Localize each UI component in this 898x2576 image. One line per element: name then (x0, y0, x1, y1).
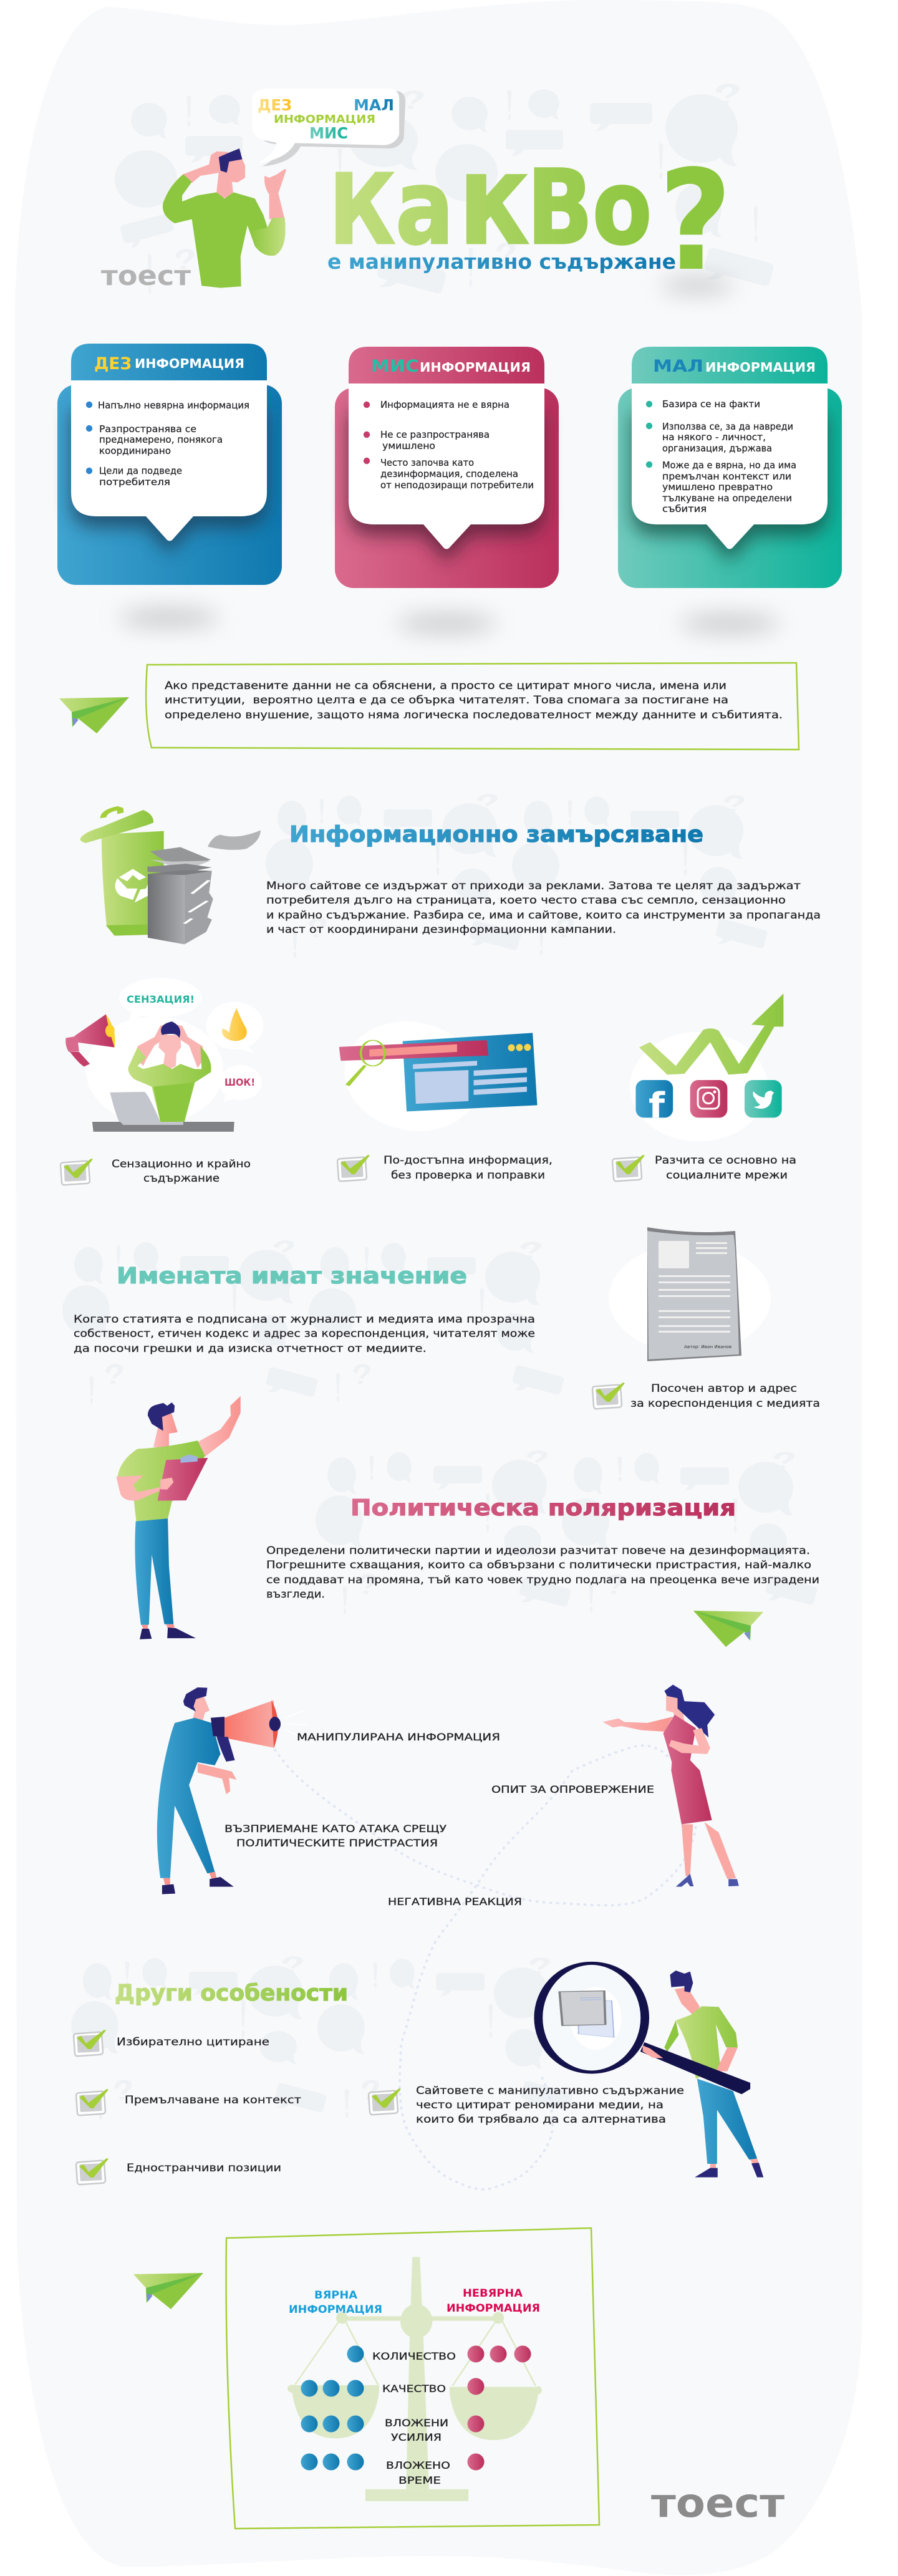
labels: cycle steps: НЕГАТИВНА РЕАКЦИЯ (388, 1896, 522, 1908)
text: Имената имат значение: собственост, етичен кодекс и адрес за кореспонденция, читателят може (74, 1328, 535, 1340)
card: ДЕЗинформация: Разпространява се (99, 423, 196, 435)
rating dots: false information (468, 2346, 531, 2471)
illustration: sensational content (65, 978, 263, 1132)
text: Информационно замърсяване: и крайно съдържание. Разбира се, има и сайтове, които са инструменти за пропаганда (266, 909, 821, 922)
text: Политическа поляризация: възгледи. (266, 1588, 325, 1601)
title: В (527, 148, 593, 268)
card: МАЛинформация: тълкуване на определени (662, 493, 792, 504)
checklist: other features (74, 2030, 301, 2185)
text: Политическа поляризация (266, 1545, 819, 1601)
heading: Други особености: Други особености (115, 1980, 348, 2006)
callout box: Ако представените данни не са обяснени, а просто се цитират много числа, имена или (165, 680, 727, 692)
checkbox: social: Разчита се основно на (655, 1154, 796, 1167)
title: о (592, 148, 652, 268)
heading: Невярна информация: ИНФОРМАЦИЯ (447, 2302, 540, 2315)
card: МАЛинформация: събития (662, 503, 707, 514)
callout box: институции, вероятно целта е да се обърка читателят. Това спомага за постигане на (165, 694, 728, 707)
heading: Вярна информация: ИНФОРМАЦИЯ (289, 2303, 382, 2316)
checklist: other features: Премълчаване на контекст (125, 2094, 301, 2106)
card: ДЕЗинформация: ДЕЗ (94, 354, 132, 374)
card: МАЛинформация: организация, държава (662, 443, 772, 454)
checkbox: sensational: Сензационно и крайно (112, 1158, 251, 1170)
text: Информационно замърсяване: Много сайтове се издържат от приходи за реклами. Затова те целят да задържат (266, 880, 801, 892)
card: МАЛинформация: ИНФОРМАЦИЯ (705, 360, 816, 375)
row labels (372, 2350, 456, 2486)
title: К (329, 153, 395, 266)
row labels: ВРЕМЕ (398, 2474, 441, 2486)
heading: Имената имат значение: Имената имат значение (117, 1263, 467, 1289)
text: Политическа поляризация: Погрешните схващания, които са обвързани с политически пристрастия, най-малко (266, 1559, 811, 1571)
icon: trash bin with paper stack (80, 806, 261, 944)
checkbox: reputable media: които би трябвало да са алтернатива (416, 2113, 666, 2126)
text: Информационно замърсяване (266, 880, 821, 936)
text: Информационно замърсяване: потребителя дълго на страницата, което често става със семпло, сензационно (266, 894, 786, 907)
card: ДЕЗинформация: координирано (99, 445, 171, 456)
icon: twitter (753, 1091, 774, 1109)
checkbox: social: социалните мрежи (666, 1169, 788, 1182)
speech bubble: ДЕЗ МАЛ информация МИС: МАЛ (354, 96, 394, 114)
illustration: article document (609, 1227, 771, 1361)
rating dots: true information (301, 2346, 364, 2471)
heading: Невярна информация (447, 2287, 540, 2315)
speech bubble: ДЕЗ МАЛ информация МИС (252, 89, 405, 166)
heading: Политическа поляризация: Политическа поляризация (350, 1495, 736, 1521)
card: ДЕЗинформация (57, 344, 282, 627)
title: к (458, 128, 529, 273)
card: МАЛинформация: МАЛ (653, 357, 703, 376)
checkbox: author and address: Посочен автор и адрес (651, 1382, 797, 1395)
logo: тоест: тоест (101, 260, 191, 292)
box: true vs false information (226, 2228, 599, 2529)
checkbox: social (612, 1154, 796, 1182)
illustration: thinking person (163, 148, 286, 288)
card: МИСинформация: ИНФОРМАЦИЯ (420, 360, 531, 375)
checkbox: sensational (60, 1158, 251, 1185)
checklist: other features: Избирателно цитиране (117, 2036, 269, 2048)
checkbox: reputable media (369, 2085, 684, 2126)
card: МАЛинформация: Базира се на факти (662, 398, 760, 410)
subtitle: е манипулативно съдържане (327, 249, 676, 274)
card: ДЕЗинформация: Цели да подведе (99, 465, 182, 476)
checkbox: accessible: без проверка и поправки (391, 1169, 545, 1182)
heading: Информационно замърсяване: Информационно замърсяване (289, 822, 703, 847)
shadow under question mark (661, 278, 733, 293)
icon: instagram (698, 1088, 719, 1109)
labels: cycle steps: ПОЛИТИЧЕСКИТЕ ПРИСТРАСТИЯ (236, 1837, 438, 1849)
card: ДЕЗинформация: потребителя (99, 476, 170, 488)
row labels: УСИЛИЯ (391, 2431, 442, 2443)
illustration: man with megaphone (157, 1687, 309, 1894)
text: Политическа поляризация: Определени политически партии и идеолози разчитат повече на дезинформацията. (266, 1545, 810, 1557)
labels: cycle steps: ВЪЗПРИЕМАНЕ КАТО АТАКА СРЕЩУ (224, 1823, 447, 1835)
speech bubble: ДЕЗ МАЛ информация МИС: МИС (309, 124, 348, 142)
heading: Невярна информация: НЕВЯРНА (463, 2287, 523, 2300)
card: МИСинформация: Не се разпространява (380, 429, 490, 440)
illustration: article document: Автор: Иван Иванов (684, 1344, 731, 1349)
illustration: scale (287, 2257, 542, 2501)
labels: cycle steps: ОПИТ ЗА ОПРОВЕРЖЕНИЕ (491, 1783, 654, 1795)
text: Политическа поляризация: се поддават на промяна, тъй като човек трудно подлага на преоценка вече изградени (266, 1574, 819, 1586)
text: Информационно замърсяване: и част от координирани дезинформационни кампании. (266, 924, 616, 936)
speech bubble: ДЕЗ МАЛ информация МИС: ДЕЗ (258, 96, 292, 114)
illustration: social networks growth (630, 993, 783, 1141)
checkbox: author and address (592, 1382, 820, 1410)
labels: cycle steps (224, 1731, 654, 1908)
checkbox: accessible (337, 1154, 553, 1182)
text: Имената имат значение: да посочи грешки и да изиска отчетност от медиите. (74, 1343, 427, 1355)
question mark: ? (659, 141, 732, 302)
illustration: woman pointing (602, 1685, 739, 1887)
dotted path: cycle (275, 1745, 696, 2189)
heading: Вярна информация: ВЯРНА (314, 2289, 358, 2302)
text: Имената имат значение: Когато статията е подписана от журналист и медията има прозрачна (74, 1313, 535, 1326)
card: МАЛинформация: Може да е вярна, но да има (662, 460, 796, 471)
illustration: person with magnifier (538, 1963, 763, 2178)
speech bubble: ДЕЗ МАЛ информация МИС: ИНФОРМАЦИЯ (274, 113, 375, 126)
row labels: ВЛОЖЕНО (386, 2459, 450, 2471)
card: ДЕЗинформация: преднамерено, понякога (99, 434, 223, 445)
checkbox: accessible: По-достъпна информация, (384, 1154, 553, 1167)
labels: cycle steps: МАНИПУЛИРАНА ИНФОРМАЦИЯ (297, 1731, 500, 1743)
title: а (395, 148, 454, 268)
illustration: sensational content: ШОК! (224, 1076, 255, 1088)
illustration: accessible browser window (337, 1020, 537, 1132)
checkbox: sensational: съдържание (143, 1172, 220, 1185)
card: МИСинформация: МИС (371, 357, 419, 376)
card: МАЛинформация (618, 347, 842, 632)
checklist: other features: Едностранчиви позиции (127, 2162, 281, 2174)
card: МИСинформация: умишлено (382, 440, 435, 451)
illustration: man with clipboard (116, 1396, 241, 1639)
card: МАЛинформация: Използва се, за да навреди (662, 421, 793, 432)
text: Имената имат значение (74, 1313, 535, 1355)
logo: тоест: тоест (651, 2481, 785, 2527)
icon: facebook: f (649, 1086, 665, 1126)
card: ДЕЗинформация: ИНФОРМАЦИЯ (135, 356, 244, 371)
icon: paper plane (693, 1611, 763, 1647)
callout box: определено внушение, защото няма логическа последователност между данните и събитията. (165, 709, 783, 721)
row labels: ВЛОЖЕНИ (385, 2417, 448, 2429)
card: МИСинформация: дезинформация, споделена (380, 468, 518, 480)
illustration: sensational content: СЕНЗАЦИЯ! (127, 993, 195, 1005)
heading: Вярна информация (289, 2289, 382, 2316)
card: ДЕЗинформация: Напълно невярна информация (98, 400, 249, 411)
row labels: КОЛИЧЕСТВО (372, 2350, 456, 2362)
checkbox: author and address: за кореспонденция с медията (630, 1397, 820, 1410)
icon: paper plane (133, 2273, 203, 2309)
card: МИСинформация: от неподозиращи потребители (380, 480, 534, 491)
card: МИСинформация (335, 347, 559, 632)
card: МИСинформация: Често започва като (380, 457, 474, 468)
callout box (146, 663, 799, 750)
icon: paper plane (59, 697, 129, 733)
checkbox: reputable media: често цитират реномирани медии, на (416, 2099, 664, 2111)
card: МАЛинформация: на някого - личност, (662, 432, 766, 443)
checkbox: reputable media: Сайтовете с манипулативно съдържание (416, 2085, 684, 2097)
card: МАЛинформация: умишлено превратно (662, 481, 773, 493)
card: МАЛинформация: премълчан контекст или (662, 471, 791, 482)
row labels: КАЧЕСТВО (382, 2383, 446, 2395)
card: МИСинформация: Информацията не е вярна (380, 399, 509, 410)
